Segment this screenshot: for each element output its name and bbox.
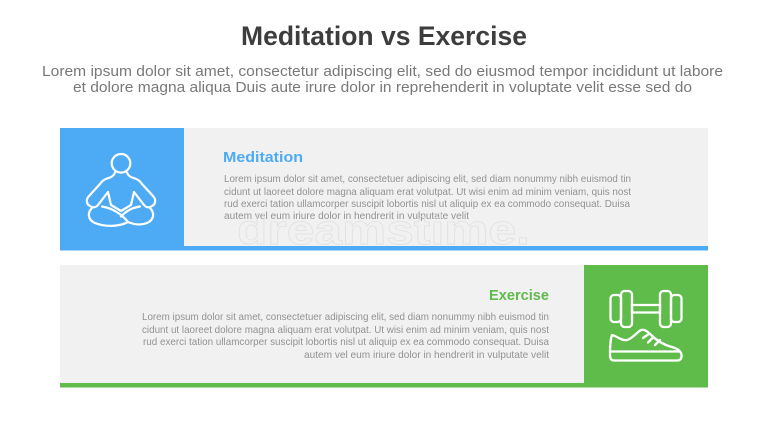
exercise body text: cidunt ut laoreet dolore magna aliquam erat volutpat. Ut wisi enim ad minim veniam, quis nost (142, 324, 549, 336)
exercise icon tile (584, 265, 708, 388)
subtitle text block: Lorem ipsum dolor sit amet, consectetur adipiscing elit, sed do eiusmod tempor incididunt ut labore (42, 63, 723, 80)
icon: meditating person (87, 154, 155, 226)
icon: dumbbell (610, 291, 682, 327)
exercise panel background (60, 265, 584, 383)
panel: meditation (60, 128, 708, 250)
panel: exercise (60, 265, 708, 388)
meditation heading: Meditation (223, 150, 303, 166)
exercise body text (142, 311, 549, 361)
meditation panel background (184, 128, 708, 246)
meditation accent bar (184, 246, 708, 250)
subtitle text block (42, 63, 723, 96)
title: Meditation vs Exercise (241, 21, 527, 51)
exercise body text: autem vel eum iriure dolor in hendrerit in vulputate velit (304, 349, 549, 361)
meditation body text: Lorem ipsum dolor sit amet, consectetuer adipiscing elit, sed diam nonummy nibh euismod tin (224, 173, 631, 185)
meditation body text (224, 173, 631, 222)
meditation icon tile (60, 128, 184, 250)
meditation body text: autem vel eum iriure dolor in hendrerit in vulputate velit (224, 210, 469, 222)
watermark: dreamstime. (237, 206, 530, 253)
exercise accent bar (60, 383, 584, 388)
meditation body text: cidunt ut laoreet dolore magna aliquam erat volutpat. Ut wisi enim ad minim veniam, quis nost (224, 186, 631, 198)
meditation body text: rud exerci tation ullamcorper suscipit lobortis nisl ut aliquip ex ea commodo consequat. Duisa (224, 198, 630, 210)
exercise body text: rud exerci tation ullamcorper suscipit lobortis nisl ut aliquip ex ea commodo consequat. Duisa (143, 336, 549, 348)
subtitle text block: et dolore magna aliqua Duis aute irure dolor in reprehenderit in voluptate velit esse sed do (73, 79, 692, 96)
exercise body text: Lorem ipsum dolor sit amet, consectetuer adipiscing elit, sed diam nonummy nibh euismod tin (142, 311, 549, 323)
icon: sneaker (610, 330, 682, 360)
exercise heading: Exercise (489, 288, 549, 304)
